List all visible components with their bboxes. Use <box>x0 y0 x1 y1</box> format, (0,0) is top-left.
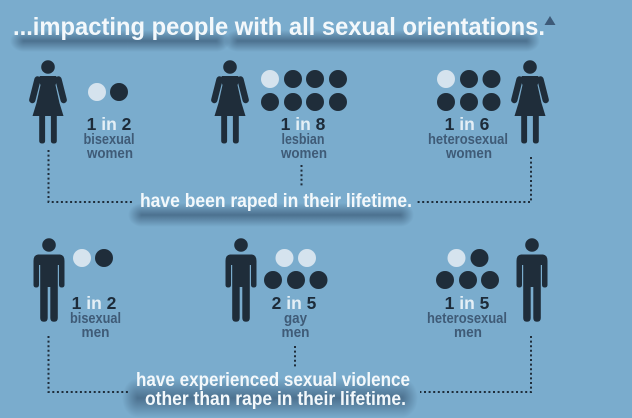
group: bisexual men <box>34 238 121 341</box>
statistic: 2 in 5: 2 in 5 <box>272 293 317 313</box>
icon: man <box>34 238 64 322</box>
dots: 1 of 8 <box>261 70 347 111</box>
label: gay men <box>282 310 310 341</box>
statistic: 1 in 2: 1 in 2 <box>87 114 132 134</box>
dots: 2 of 5 <box>264 249 328 289</box>
group: lesbian women <box>214 60 347 162</box>
title: ...impacting people with all sexual orientations. <box>13 13 545 41</box>
label: bisexual women: bisexual <box>84 131 134 148</box>
caption shadow band: rape statistic <box>128 203 414 227</box>
label: lesbian women: women <box>280 145 327 162</box>
label: bisexual men: men <box>82 324 110 341</box>
label: heterosexual women <box>428 131 508 162</box>
icon: woman <box>214 60 246 144</box>
label: heterosexual men: men <box>454 324 482 341</box>
caption: sexual violence statistic <box>136 370 410 410</box>
icon: man <box>226 238 256 322</box>
label: heterosexual women: heterosexual <box>428 131 508 148</box>
dots: 1 of 2 <box>73 249 113 267</box>
caption: sexual violence statistic: have experienced sexual violence <box>136 370 410 391</box>
caption: sexual violence statistic: other than rape in their lifetime. <box>145 389 406 410</box>
icon: small triangle mark <box>544 16 556 25</box>
connector: women row <box>48 150 531 202</box>
dots: 1 of 2 <box>88 83 128 101</box>
label: gay men: men <box>282 324 310 341</box>
label: heterosexual women: women <box>445 145 492 162</box>
label: bisexual men: bisexual <box>70 310 121 327</box>
label: heterosexual men <box>427 310 507 341</box>
group: heterosexual men <box>427 238 548 341</box>
statistic: 1 in 5: 1 in 5 <box>445 293 490 313</box>
dots: 1 of 5 <box>436 249 499 289</box>
statistic: 1 in 2: 1 in 2 <box>72 293 117 313</box>
icon: woman <box>514 60 546 144</box>
label: lesbian women <box>280 131 327 162</box>
label: lesbian women: lesbian <box>282 131 324 148</box>
group: bisexual women <box>32 60 134 162</box>
label: heterosexual men: heterosexual <box>427 310 507 327</box>
group: heterosexual women <box>428 60 546 162</box>
label: gay men: gay <box>284 310 308 327</box>
caption: rape statistic: have been raped in their lifetime. <box>140 191 412 212</box>
dots: 1 of 6 <box>437 70 500 111</box>
label: bisexual women <box>84 131 134 162</box>
group: gay men <box>226 238 328 341</box>
caption shadow band: sexual violence statistic <box>122 378 418 418</box>
label: bisexual men <box>70 310 121 341</box>
statistic: 1 in 6: 1 in 6 <box>445 114 490 134</box>
title shadow band <box>10 30 540 52</box>
label: bisexual women: women <box>86 145 133 162</box>
connector: men row <box>48 336 531 392</box>
icon: woman <box>32 60 64 144</box>
statistic: 1 in 8: 1 in 8 <box>281 114 326 134</box>
icon: man <box>516 238 548 322</box>
